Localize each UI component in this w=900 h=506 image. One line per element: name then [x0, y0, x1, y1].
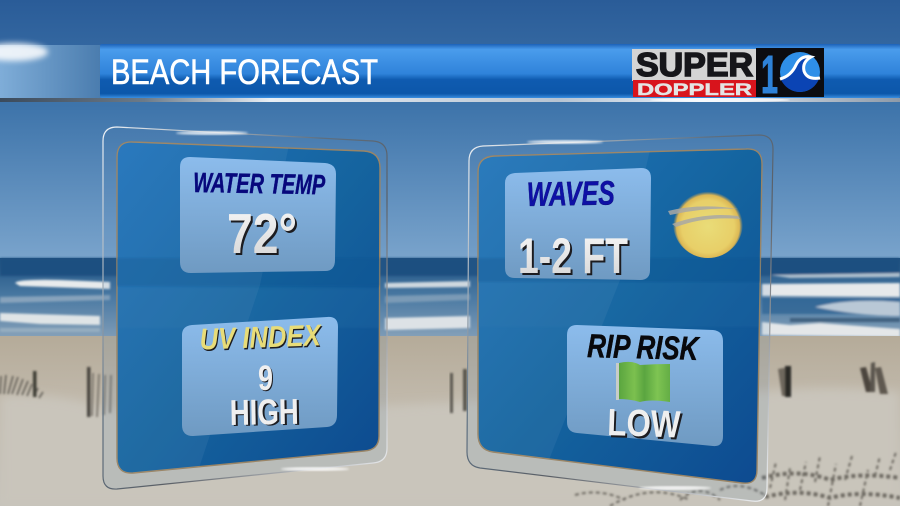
- panel reflections: [110, 140, 390, 480]
- level: HIGH: [229, 391, 299, 433]
- glint top: [527, 140, 603, 144]
- header bar: [100, 44, 900, 98]
- logo doppler word: DOPPLER: [637, 80, 752, 99]
- level shadow: LOW: [609, 404, 683, 449]
- header highlight: [0, 43, 48, 61]
- rip risk box: [567, 325, 723, 449]
- label shadow: UV INDEX: [200, 321, 324, 358]
- waves box: [505, 168, 651, 286]
- sand: [0, 336, 900, 506]
- panel: left (water temp and UV index): [103, 127, 390, 489]
- level shadow: HIGH: [231, 392, 301, 434]
- glass frame: [467, 135, 773, 501]
- logo numeral one: 1: [761, 45, 778, 105]
- glass frame: [103, 127, 387, 489]
- water temp box: [180, 157, 336, 273]
- box: [180, 157, 336, 273]
- sky: [0, 0, 900, 260]
- box: [182, 317, 338, 436]
- box: [505, 168, 651, 280]
- logo: Super Doppler 10: [632, 45, 824, 105]
- glint bottom: [281, 467, 349, 471]
- logo doppler plate: [633, 80, 756, 97]
- title: BEACH FORECAST: [111, 53, 378, 92]
- value shadow: 1-2 FT: [520, 230, 630, 286]
- fence centre: [450, 369, 467, 413]
- dune grass: [575, 452, 900, 506]
- logo super plate: [632, 49, 756, 81]
- label: UV INDEX: [199, 319, 323, 356]
- index shadow: 9: [259, 360, 274, 399]
- box: [567, 325, 723, 446]
- fence left: [0, 367, 111, 417]
- header rail: [0, 98, 900, 102]
- label: RIP RISK: [587, 327, 700, 367]
- logo black backing: [756, 48, 824, 97]
- value: 72°: [227, 202, 297, 266]
- sun disc: [673, 188, 743, 258]
- logo super word: SUPER: [636, 46, 753, 83]
- posts right: [778, 362, 888, 397]
- header band left silver section: [0, 45, 101, 98]
- blue panel: [478, 149, 762, 483]
- logo underline glow: [650, 98, 790, 102]
- panel: right (waves and rip risk): [467, 135, 773, 501]
- value shadow: 72°: [229, 204, 299, 268]
- glint bottom: [639, 486, 711, 490]
- glint top: [176, 131, 248, 135]
- blue panel: [117, 142, 380, 473]
- index value: 9: [258, 359, 273, 398]
- cloud streaks: [668, 206, 740, 227]
- uv index box: [182, 317, 338, 436]
- icon: green flag: [616, 362, 670, 402]
- icon: sun with clouds: [668, 188, 743, 258]
- ocean: [0, 258, 900, 338]
- label: WATER TEMP: [193, 167, 326, 200]
- sand dune: [0, 388, 900, 506]
- panel reflections: [470, 150, 770, 470]
- value: 1-2 FT: [518, 228, 628, 284]
- label: WAVES: [526, 174, 615, 214]
- level: LOW: [607, 402, 681, 447]
- logo wave circle: [780, 52, 820, 92]
